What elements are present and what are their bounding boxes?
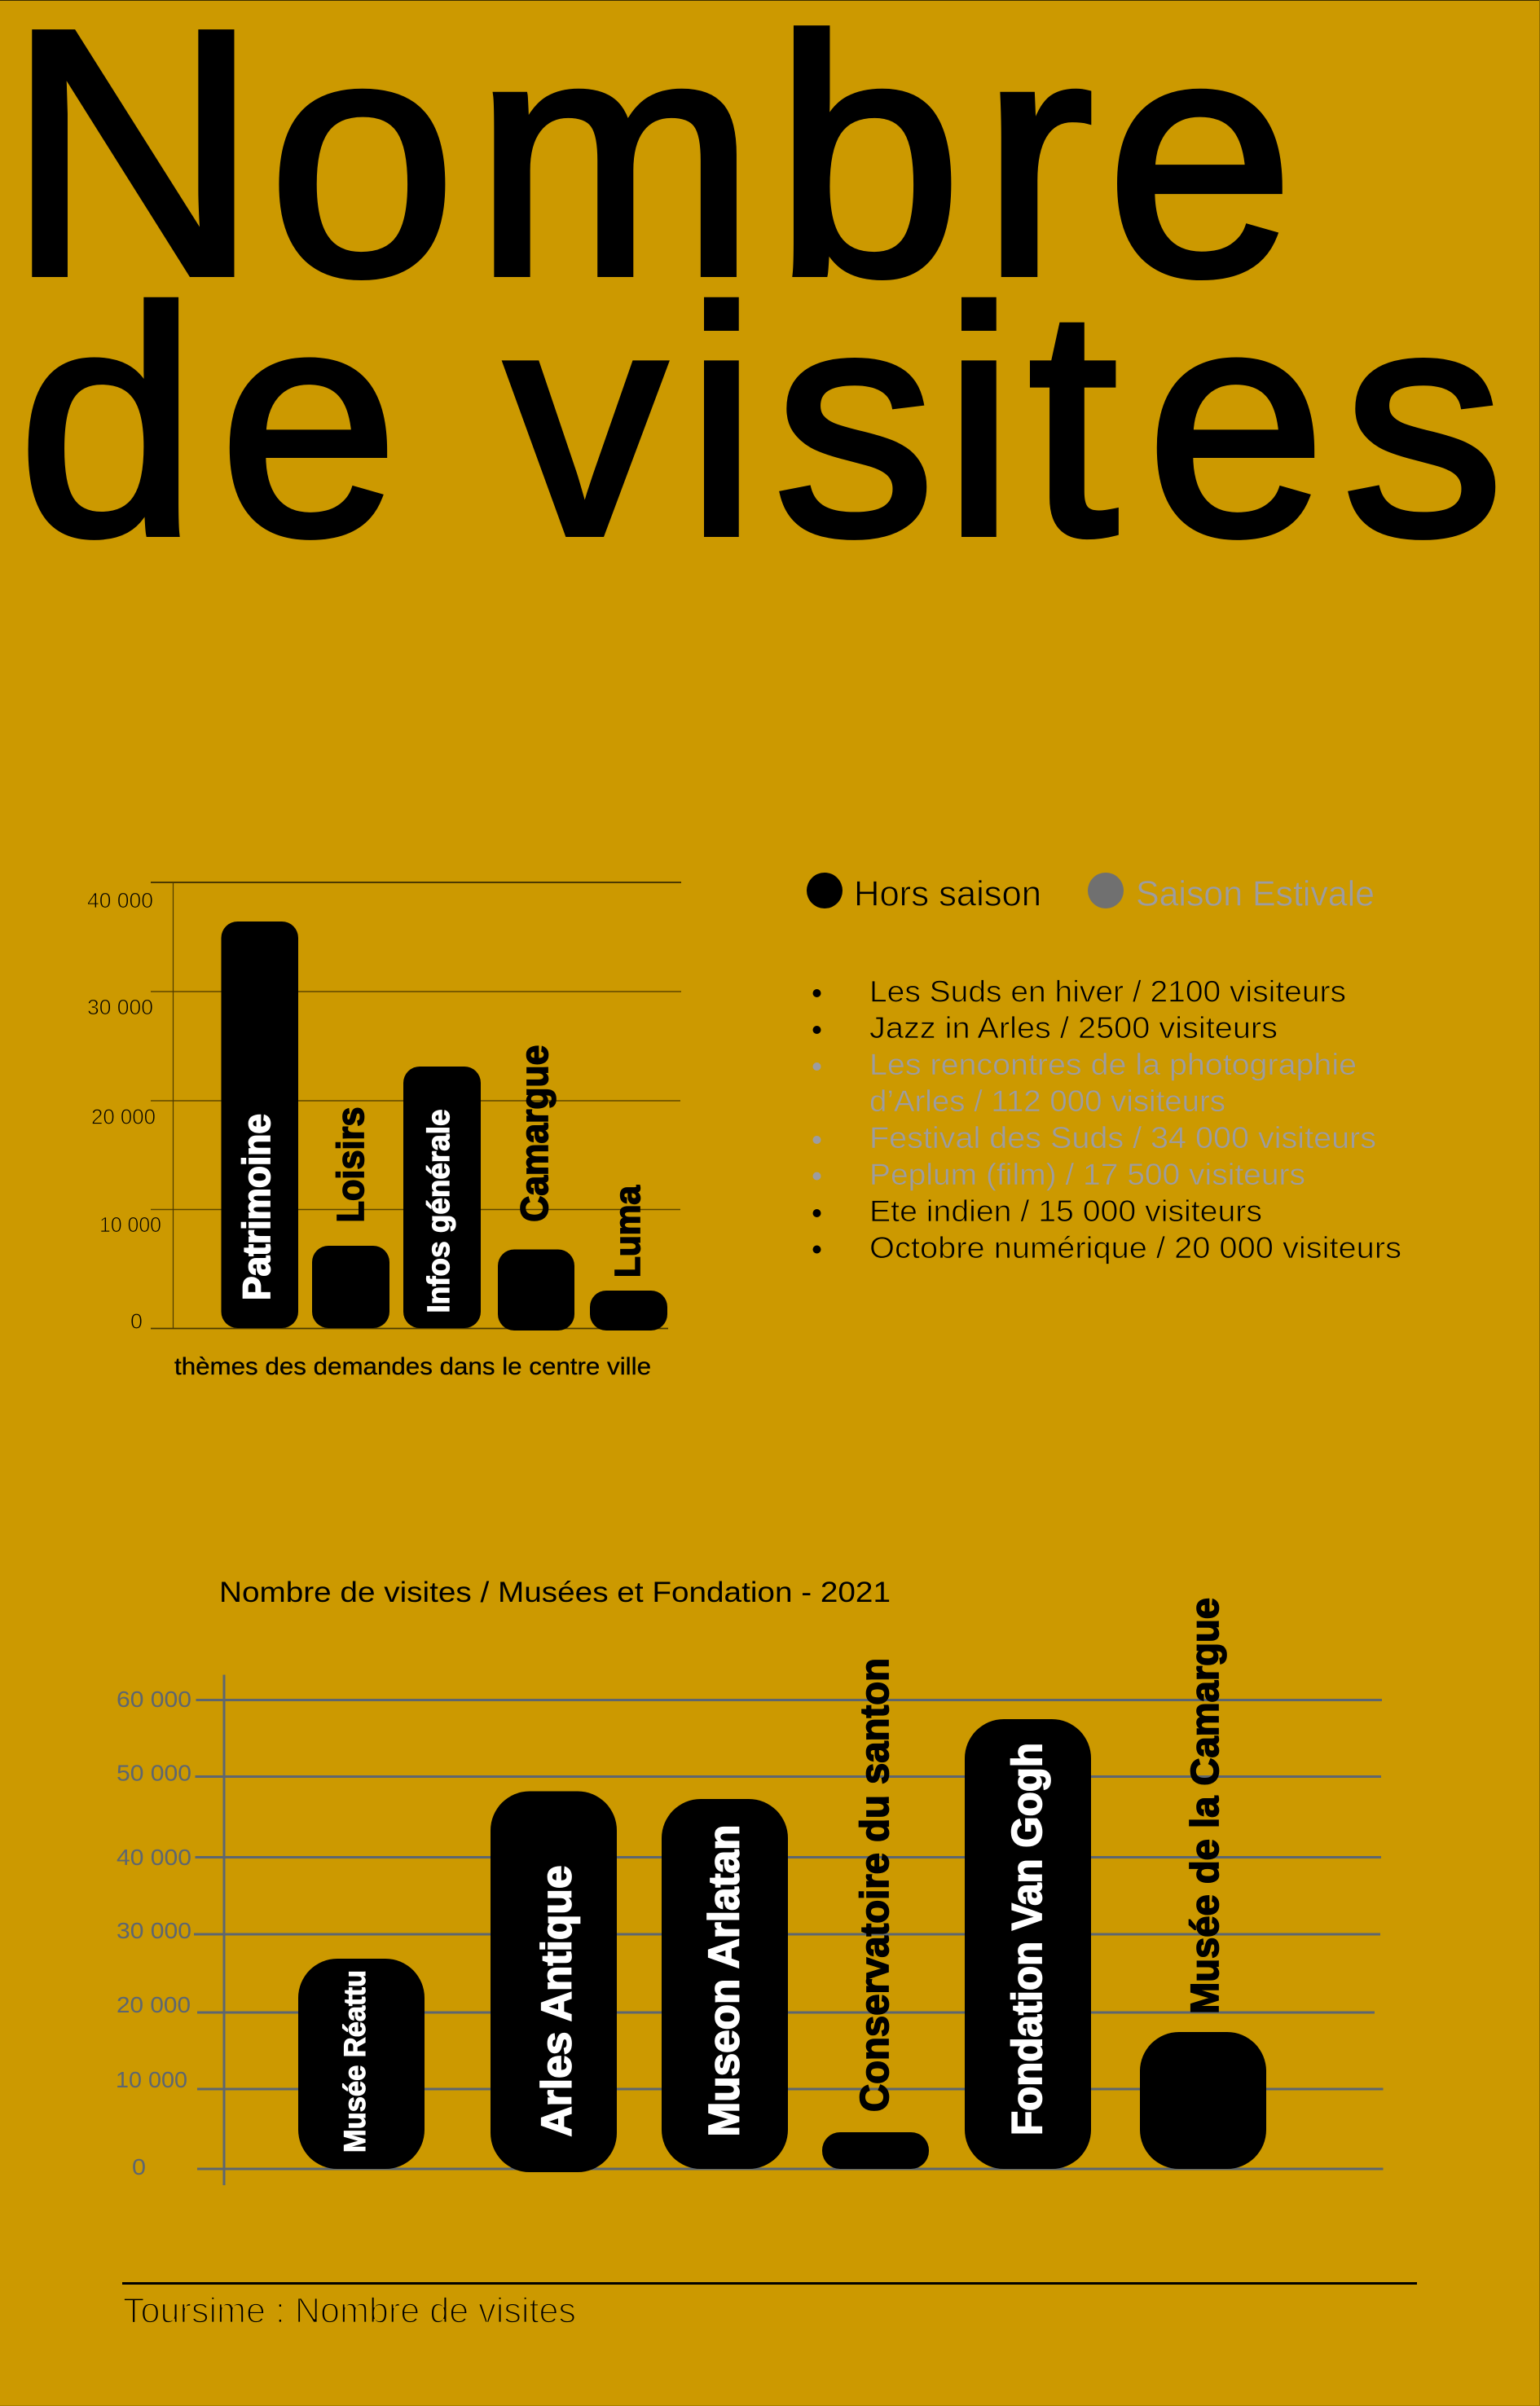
y axis labels: [116, 1687, 191, 2179]
bar: Infos générale: [403, 1067, 481, 1328]
item: Festival des Suds: Festival des Suds / 34 000 visiteurs: [869, 1121, 1376, 1155]
events list: [813, 974, 1401, 1265]
legend: saison estivale: Saison Estivale: [1136, 873, 1375, 914]
y axis labels: 10 000: [116, 2067, 187, 2092]
bar: Museon Arlatan: Museon Arlatan: [701, 1825, 748, 2136]
y axis labels: [87, 888, 161, 1333]
bar: Patrimoine: Patrimoine: [235, 1114, 278, 1300]
gridlines and axis: [194, 1675, 1384, 2185]
y axis labels: 10 000: [99, 1212, 161, 1237]
legend: hors saison: Hors saison: [854, 873, 1041, 914]
item: Les rencontres de la photographie: [813, 1048, 1357, 1118]
legend: [807, 873, 1375, 914]
bar: Camargue: Camargue: [513, 1045, 556, 1222]
y axis labels: 20 000: [117, 1992, 191, 2017]
y axis labels: 50 000: [117, 1760, 191, 1786]
title: [7, 0, 1504, 602]
item: Jazz in Arles: Jazz in Arles / 2500 visiteurs: [869, 1011, 1278, 1045]
bar: Arles Antique: [491, 1791, 617, 2172]
y axis labels: 60 000: [117, 1687, 191, 1712]
y axis labels: 40 000: [87, 888, 153, 913]
bar: Arles Antique: Arles Antique: [533, 1866, 580, 2136]
y axis labels: 30 000: [117, 1918, 191, 1943]
item: Les rencontres de la photographie: Les rencontres de la photographie: [869, 1048, 1357, 1081]
bar: Musée Réattu: [298, 1959, 425, 2169]
y axis labels: 30 000: [87, 995, 153, 1019]
bar: Infos générale: Infos générale: [422, 1110, 456, 1313]
chart title: museums: Nombre de visites / Musées et Fondation - 2021: [219, 1577, 891, 1608]
bar: Loisirs: [312, 1106, 389, 1328]
item: Les Suds en hiver: Les Suds en hiver / 2100 visiteurs: [869, 974, 1346, 1009]
title: de visites: [18, 242, 1504, 602]
bar: Conservatoire du santon: [822, 1658, 929, 2169]
bar: Conservatoire du santon: Conservatoire du santon: [853, 1658, 897, 2112]
y axis labels: 40 000: [117, 1845, 191, 1870]
item: Peplum (film): Peplum (film) / 17 500 visiteurs: [869, 1158, 1305, 1191]
bar: Loisirs: Loisirs: [329, 1106, 372, 1222]
bar: Fondation Van Gogh: [965, 1719, 1091, 2169]
panel: themes bar chart: [87, 882, 681, 1380]
bar: Patrimoine: [222, 921, 298, 1328]
panel: museums bar chart: [116, 1598, 1384, 2185]
x axis caption: thèmes des demandes dans le centre ville: [174, 1353, 651, 1380]
bar: Fondation Van Gogh: Fondation Van Gogh: [1004, 1743, 1051, 2135]
bar: Luma: [590, 1185, 667, 1331]
y axis labels: 20 000: [91, 1105, 156, 1129]
item: Octobre numérique: Octobre numérique / 20 000 visiteurs: [869, 1231, 1401, 1265]
item: Ete indien: Ete indien / 15 000 visiteurs: [869, 1194, 1262, 1228]
y axis labels: 0: [132, 2154, 146, 2179]
footer: Toursime : Nombre de visites: [123, 2291, 576, 2330]
bar: Museon Arlatan: [662, 1799, 788, 2169]
bar: Musée de la Camargue: [1140, 1598, 1266, 2169]
bar: Luma: Luma: [608, 1185, 648, 1278]
gridlines and axis: [151, 882, 681, 1329]
bar: Camargue: [498, 1045, 574, 1331]
bar: Musée de la Camargue: Musée de la Camargue: [1184, 1598, 1227, 2014]
y axis labels: 0: [130, 1309, 143, 1333]
bar: Musée Réattu: Musée Réattu: [338, 1970, 372, 2153]
item: Les rencontres de la photographie: d’Arles / 112 000 visiteurs: [869, 1084, 1225, 1118]
